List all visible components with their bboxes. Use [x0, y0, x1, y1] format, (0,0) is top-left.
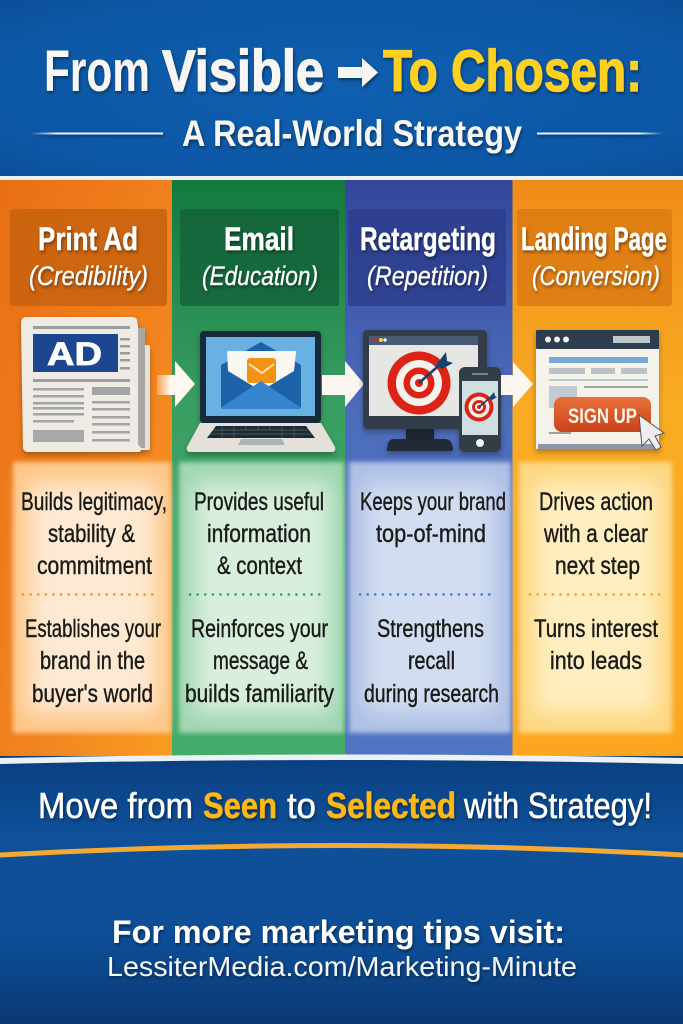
text block: Email benefits [185, 488, 334, 708]
arrow: email to retargeting [322, 361, 364, 407]
arrow: retargeting to landing page [501, 362, 533, 407]
text block: Email benefits: message & [213, 647, 308, 675]
text block: Print Ad benefits: buyer's world [32, 680, 153, 708]
icon: landing page browser with sign up button [536, 330, 664, 450]
text block: Retargeting benefits: Keeps your brand [360, 488, 506, 516]
panel: Email header: Email [224, 221, 294, 257]
tagline [38, 785, 652, 826]
text block: Landing Page benefits: Turns interest [534, 615, 658, 643]
text block: Landing Page benefits [530, 488, 663, 675]
text block: Email benefits: information [207, 520, 311, 548]
subtitle: A Real-World Strategy [182, 113, 522, 154]
text block: Print Ad benefits: Establishes your [25, 615, 161, 643]
text block: Retargeting benefits: during research [364, 680, 499, 708]
text block: Email benefits: Provides useful [194, 488, 324, 516]
panel: Retargeting header: Retargeting [360, 221, 496, 257]
panel: Retargeting header [348, 209, 506, 306]
panel: Landing Page header: (Conversion) [532, 261, 660, 291]
text block: Landing Page benefits: into leads [550, 647, 642, 675]
text block: Print Ad benefits [21, 488, 167, 708]
text block: Landing Page benefits: Drives action [539, 488, 653, 516]
text block: Retargeting benefits: recall [408, 647, 455, 675]
tagline: Selected [326, 785, 456, 826]
icon: landing page browser with sign up button: SIGN UP [568, 405, 637, 428]
top divider [0, 176, 683, 180]
text block: Print Ad benefits: brand in the [40, 647, 145, 675]
text block: Print Ad benefits: stability & [48, 520, 135, 548]
tagline: to [287, 785, 316, 826]
icon: newspaper with AD: AD [47, 336, 102, 372]
icon: monitor and phone with target [363, 330, 501, 452]
panel: column backgrounds [0, 180, 683, 756]
call to action: For more marketing tips visit: [112, 914, 565, 950]
orange curved rule [0, 846, 683, 855]
title: Visible [162, 39, 324, 104]
panel: Retargeting header: (Repetition) [367, 261, 488, 291]
text block: Print Ad benefits: Builds legitimacy, [21, 488, 167, 516]
header background [0, 0, 683, 178]
title: From [44, 39, 150, 104]
text block: Retargeting benefits: top-of-mind [376, 520, 486, 548]
tagline: with Strategy! [463, 785, 652, 826]
arrow: print to email [157, 361, 195, 407]
text block: Email benefits: Reinforces your [191, 615, 328, 643]
panel: Email header [180, 209, 339, 306]
footer background [0, 755, 683, 1024]
text block: Landing Page benefits: with a clear [543, 520, 648, 548]
text block: Email benefits: & context [217, 552, 302, 580]
text block: Retargeting benefits [360, 488, 506, 708]
text block: Print Ad benefits: commitment [37, 552, 152, 580]
text block: Landing Page benefits: next step [555, 552, 640, 580]
tagline: Seen [203, 785, 277, 826]
panel: Landing Page header [517, 209, 672, 306]
panel: Print Ad header: (Credibility) [29, 261, 148, 291]
body panel backgrounds [13, 462, 672, 733]
tagline: Move from [38, 785, 193, 826]
title [44, 39, 642, 104]
call to action [107, 914, 577, 982]
panel: Email header: (Education) [202, 261, 318, 291]
icon: newspaper with AD [21, 317, 150, 452]
text block: Email benefits: builds familiarity [185, 680, 334, 708]
icon: laptop with email envelope [187, 331, 335, 452]
panel: Print Ad header: Print Ad [38, 221, 138, 257]
panel: Print Ad header [10, 209, 167, 306]
bottom divider [0, 754, 683, 764]
call to action: LessiterMedia.com/Marketing-Minute [107, 951, 577, 982]
text block: Retargeting benefits: Strengthens [377, 615, 484, 643]
